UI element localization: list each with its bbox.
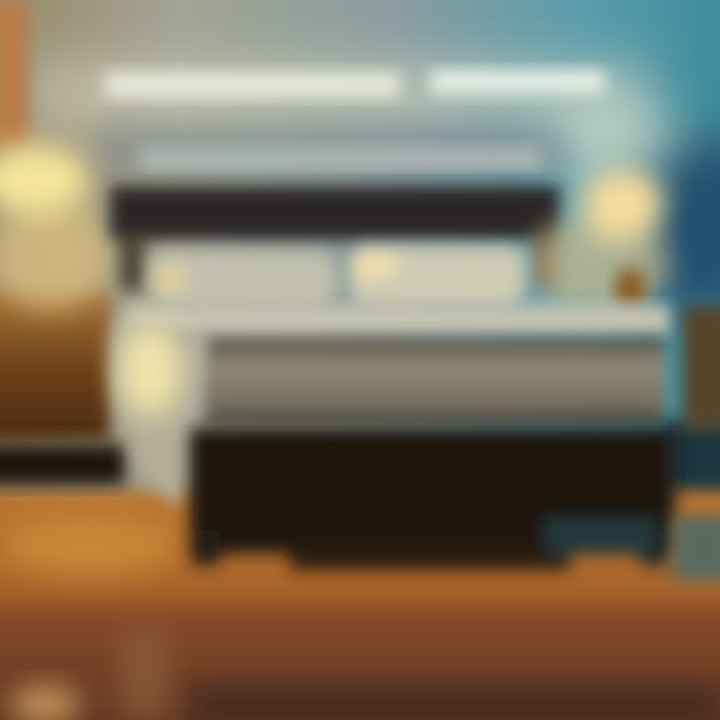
- wall background: [0, 0, 720, 520]
- bed base: [190, 428, 675, 570]
- right nightstand: [682, 305, 720, 430]
- mattress side: [205, 338, 665, 424]
- pillows: [150, 246, 525, 308]
- left lamp glow: [0, 144, 112, 310]
- wooden floor: [0, 490, 720, 720]
- blurred subtitle text: [140, 146, 540, 168]
- wall glow: [540, 100, 680, 180]
- floor at right: [672, 515, 720, 580]
- left nightstand: [0, 290, 125, 485]
- sheet overhang left: [115, 324, 205, 510]
- bed sheet: [125, 305, 670, 335]
- right lamp glow: [530, 167, 670, 315]
- bed headboard: [100, 125, 570, 290]
- blurred title text: [105, 70, 605, 98]
- lamp pole: [0, 0, 27, 150]
